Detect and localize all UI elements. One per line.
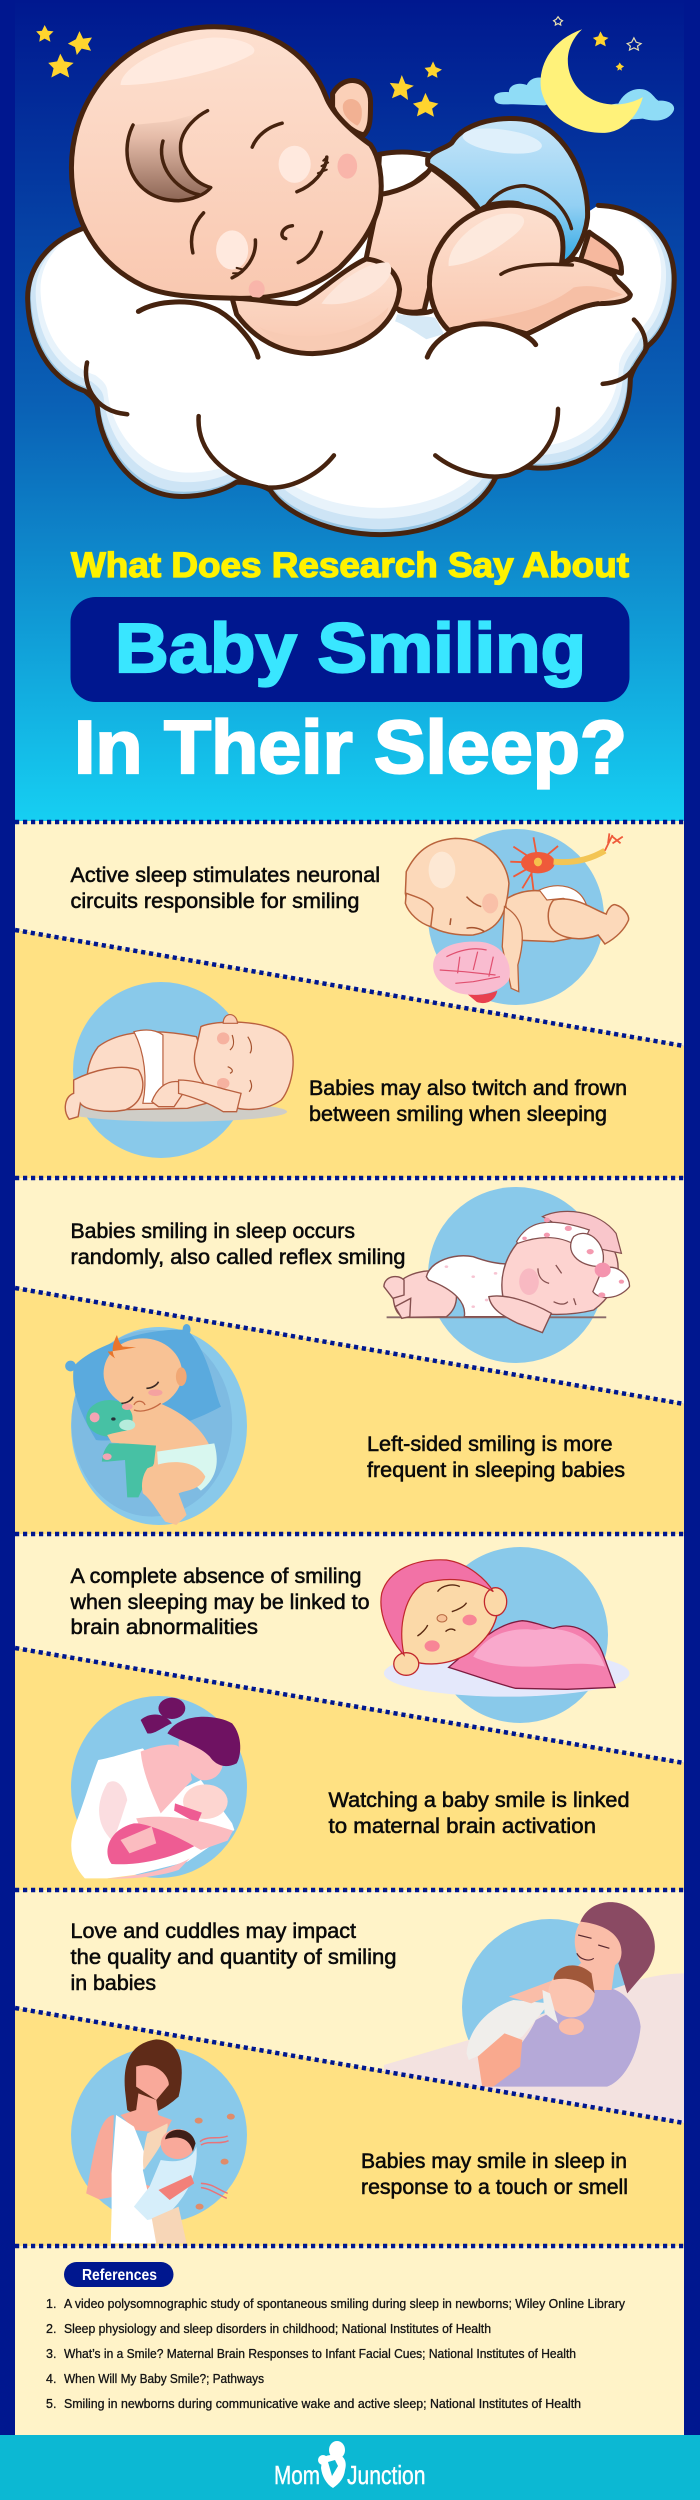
baby head [71, 27, 381, 298]
text: point 5: brain abnormalities [70, 1616, 258, 1639]
blue circle [73, 982, 249, 1158]
headband [517, 1211, 621, 1253]
reference list: Smiling in newborns during communicative wake and active sleep; National Institutes of Health [64, 2397, 581, 2411]
diaper [157, 1443, 217, 1491]
text: point 7: the quality and quantity of smiling [70, 1946, 396, 1969]
back cloud bump [377, 152, 442, 196]
reference list: What’s in a Smile? Maternal Brain Responses to Infant Facial Cues; National Institutes of Health [64, 2347, 576, 2361]
hero illustration: sleeping baby on a cloud [25, 16, 677, 538]
baby head [161, 2129, 195, 2159]
inner shade [71, 1330, 232, 1517]
baby head [397, 1573, 497, 1664]
illustration: baby with brain and neuron [405, 829, 629, 1005]
white dress [71, 1748, 234, 1878]
references [46, 2262, 626, 2411]
icon: neuron [510, 833, 623, 890]
reference list: 5. [46, 2397, 56, 2411]
ears [394, 1588, 507, 1675]
illustration: mother holding swaddled baby [71, 2039, 247, 2243]
text: point 3: Babies smiling in sleep occurs [70, 1220, 355, 1243]
blue oval [71, 1696, 247, 1878]
blue circle [71, 2047, 247, 2223]
text: point 6: Watching a baby smile is linked [328, 1789, 630, 1812]
icon: night clouds [494, 77, 674, 121]
baby hand [489, 1296, 551, 1333]
text: point 2: Babies may also twitch and frown [309, 1077, 627, 1100]
panel: band 5 [15, 1534, 684, 1763]
panel: references background [15, 2246, 684, 2435]
swaddle wrap [134, 2147, 197, 2220]
leg [152, 2207, 187, 2243]
ground line [387, 1316, 606, 1318]
footer bar [0, 2435, 700, 2500]
text: point 5: A complete absence of smiling [70, 1565, 362, 1588]
panel: band 4 [15, 1288, 684, 1534]
text: point 7: Love and cuddles may impact [70, 1920, 356, 1943]
text: point 1: Active sleep stimulates neuronal [70, 864, 380, 887]
baby hair [165, 2130, 196, 2152]
mother head [179, 1736, 223, 1780]
baby back [87, 1032, 219, 1110]
text: point 5 [69, 1565, 369, 1639]
text: point 2 [309, 1077, 627, 1126]
baby head [542, 1965, 595, 2023]
icon: logo detail [328, 2460, 338, 2476]
reference list: Sleep physiology and sleep disorders in childhood; National Institutes of Health [64, 2322, 491, 2336]
baby head [183, 1784, 228, 1819]
baby arm [502, 907, 522, 992]
text: point 4: frequent in sleeping babies [367, 1459, 625, 1482]
panel: band 1 [15, 821, 684, 1046]
diaper [134, 1030, 163, 1103]
blue circle [428, 829, 604, 1005]
text: point 1: circuits responsible for smiling [70, 890, 360, 913]
mother face [574, 1922, 622, 1966]
icon: gold stars left [36, 25, 442, 117]
baby ear [223, 1015, 238, 1023]
teddy bear [86, 1400, 156, 1497]
pillow [384, 1650, 629, 1697]
mother arm [86, 2115, 152, 2199]
text: point 6 [328, 1789, 630, 1838]
baby face [417, 1585, 477, 1652]
mother hand [478, 2033, 522, 2087]
panel: band 2 [15, 930, 684, 1178]
onesie [426, 1256, 531, 1317]
baby foot [384, 1277, 411, 1318]
reference list [46, 2297, 626, 2411]
baby far foot [580, 232, 621, 273]
text: point 6: to maternal brain activation [328, 1815, 596, 1838]
header gradient background [15, 0, 684, 821]
mother arm and hand [107, 1817, 233, 1879]
baby head [194, 1022, 293, 1109]
sleeve shade [99, 1781, 127, 1840]
bed [384, 1974, 684, 2123]
logo wordmark: Junction: Junction [347, 2460, 426, 2490]
references pill [64, 2262, 174, 2287]
chest peach [143, 2123, 168, 2170]
baby leg [548, 899, 629, 944]
icon: crescent moon [541, 29, 643, 133]
reference list: 1. [46, 2297, 56, 2311]
reference list: 4. [46, 2372, 56, 2386]
panel: band 3 [15, 1178, 684, 1404]
icon: mother and child [318, 2441, 346, 2488]
text: point 3: randomly, also called reflex smiling [70, 1246, 406, 1269]
mother face lines [577, 1935, 609, 1960]
baby leg [393, 1271, 456, 1317]
illustration: baby hugging teddy [65, 1324, 247, 1525]
heading line 3: In Their Sleep? [74, 705, 627, 789]
heading pill [70, 597, 630, 702]
baby leg [429, 205, 630, 334]
text: point 4: Left-sided smiling is more [367, 1433, 612, 1456]
chest and neck [121, 2093, 172, 2133]
text: point 1 [70, 864, 380, 913]
white dress [111, 2115, 156, 2243]
baby hands [152, 1080, 241, 1112]
text: point 8: Babies may smile in sleep in [361, 2150, 627, 2173]
baby arm [107, 1429, 179, 1447]
blue circle [462, 1919, 625, 2040]
neck [578, 1963, 615, 1990]
blue diaper [428, 118, 588, 264]
arm [509, 1980, 552, 2004]
illustration: baby in pink bow [384, 1187, 630, 1363]
text: point 4 [367, 1433, 625, 1482]
white blanket [467, 2000, 549, 2060]
text: point 8: response to a touch or smell [361, 2176, 628, 2199]
pillow [65, 1324, 221, 1441]
illustration: mother cuddling baby [384, 1902, 684, 2147]
hair back [125, 2039, 182, 2115]
icon: small moon stars [554, 17, 641, 71]
text: point 3 [70, 1220, 406, 1269]
text: point 8 [361, 2150, 628, 2199]
panel: band 6 [15, 1648, 684, 1890]
heading line 1: What Does Research Say About [71, 546, 629, 585]
illustration: baby lying on side [65, 982, 293, 1158]
baby arm [232, 259, 400, 354]
baby hand [559, 2018, 584, 2035]
pink hat [381, 1560, 493, 1655]
pink blanket [107, 1803, 202, 1864]
blue circle [428, 1187, 604, 1363]
heading line 2: Baby Smiling [115, 609, 586, 687]
baby leg [142, 1462, 205, 1525]
text: point 7 [70, 1920, 396, 1995]
baby arm [158, 2175, 194, 2200]
hair [141, 1698, 240, 1766]
front cloud lobes [85, 302, 598, 421]
panel: band 8 [15, 2008, 684, 2246]
baby leg and foot [65, 1067, 143, 1119]
baby body [504, 890, 598, 942]
reference list: 3. [46, 2347, 56, 2361]
reference list: A video polysomnographic study of spontaneous smiling during sleep in newborns; Wiley Online Library [64, 2297, 626, 2311]
reference list: 2. [46, 2322, 56, 2336]
scent dots [195, 2114, 235, 2210]
neck and chest [141, 1745, 192, 1813]
baby head [405, 838, 509, 935]
baby face [217, 1032, 252, 1092]
robe [482, 1988, 641, 2087]
baby face [519, 1265, 576, 1305]
baby head [104, 1335, 187, 1411]
footer logo [274, 2441, 426, 2490]
title [70, 546, 630, 789]
panel: band 7 [15, 1890, 684, 2123]
illustration: mother holding baby, purple hair [71, 1696, 247, 1879]
mother hair [580, 1902, 655, 1993]
reference list: When Will My Baby Smile?; Pathways [64, 2372, 264, 2386]
blue circle [432, 1547, 608, 1723]
brain [433, 942, 510, 1003]
baby torso [366, 168, 481, 312]
ground shadow [66, 1102, 287, 1122]
logo wordmark: Mom: Mom [274, 2460, 320, 2490]
text: point 5: when sleeping may be linked to [69, 1591, 369, 1614]
diaper [539, 886, 587, 907]
swaddle [449, 1621, 615, 1689]
illustration: swaddled baby in pink hat [381, 1547, 629, 1723]
baby head [502, 1223, 618, 1314]
scent waves [200, 2136, 229, 2198]
baby face [405, 852, 498, 932]
text: point 2: between smiling when sleeping [309, 1103, 607, 1126]
bow [571, 1233, 630, 1298]
cloud fold lines [86, 320, 646, 488]
references heading: References [82, 2267, 157, 2284]
blue oval [71, 1327, 247, 1525]
text: point 7: in babies [70, 1972, 156, 1995]
baby torso [112, 1396, 211, 1475]
mother face [136, 2065, 169, 2100]
back cloud [25, 151, 677, 538]
